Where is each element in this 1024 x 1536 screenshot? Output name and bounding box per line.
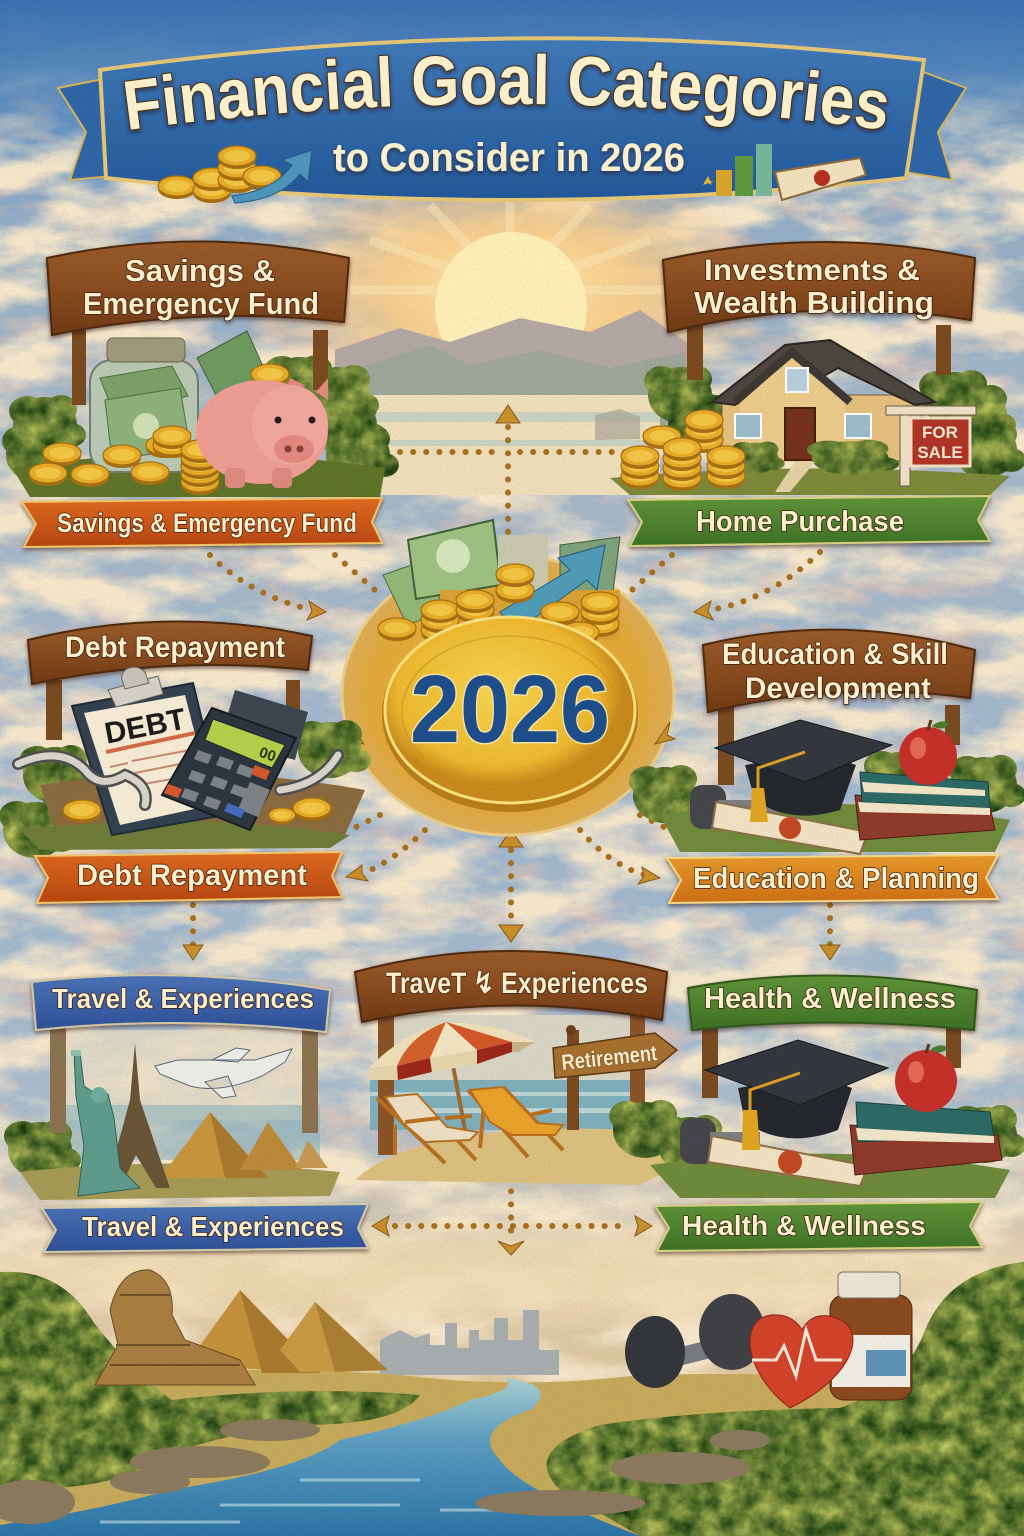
distant mountains and lake	[335, 310, 690, 495]
scene backdrop	[4, 1030, 340, 1200]
panel: beach and retirement	[355, 951, 680, 1185]
bottom landscape	[0, 1262, 1024, 1536]
title banner	[56, 36, 968, 204]
sign: Travel & Experiences	[52, 983, 314, 1014]
icon: medicine bottle	[830, 1272, 912, 1400]
panel: central 2026 coin	[342, 520, 675, 835]
icon: graduation cap	[705, 1040, 888, 1150]
sign	[47, 242, 349, 335]
big coin	[382, 616, 638, 812]
label ribbon	[667, 855, 998, 903]
scene foliage	[629, 750, 1024, 852]
scene foliage	[609, 1100, 1024, 1198]
icon: retirement signpost	[553, 1025, 677, 1130]
title text: Financial Goal Categories	[121, 52, 890, 135]
sign	[688, 975, 977, 1030]
icon: banknote	[197, 331, 267, 397]
icon: pyramids	[186, 1290, 388, 1373]
icon: calculator	[162, 690, 308, 830]
scene ground	[0, 720, 371, 858]
icon: apple	[895, 1044, 957, 1112]
sign: Wealth Building	[694, 285, 934, 320]
icon: apple	[899, 720, 957, 785]
sign: Emergency Fund	[83, 286, 319, 321]
sign: Development	[745, 672, 931, 705]
coins	[63, 798, 331, 824]
icon: for sale sign: FOR	[922, 423, 958, 442]
icon: chains	[18, 755, 338, 805]
rocks	[0, 1419, 770, 1524]
icon: diploma	[712, 802, 868, 854]
icon: money jar	[90, 338, 198, 472]
city skyline	[380, 1310, 559, 1375]
scene foliage	[610, 365, 1024, 495]
panel: savings and emergency fund	[2, 242, 399, 547]
icon: pyramids	[160, 1112, 328, 1178]
foliage right	[547, 1262, 1024, 1536]
icon: house	[712, 340, 935, 492]
label ribbon: Education & Planning	[693, 863, 979, 895]
icon: book stack	[850, 1102, 1002, 1175]
icon: coin stacks	[621, 410, 745, 491]
sign	[703, 630, 975, 712]
ground	[0, 1370, 1024, 1536]
panel: investments and home purchase	[610, 242, 1024, 546]
sign: Savings &	[125, 253, 275, 288]
sign: Investments &	[704, 254, 920, 287]
icon: lounge chairs	[377, 1087, 563, 1163]
label ribbon	[22, 498, 382, 547]
icon: beach umbrella	[369, 1022, 535, 1130]
label ribbon	[35, 852, 342, 903]
icon: debt clipboard: DEBT	[102, 703, 188, 751]
small arrows	[344, 722, 675, 744]
money pile	[378, 520, 620, 645]
sign: Debt Repayment	[65, 631, 285, 664]
panel: debt repayment	[0, 621, 371, 903]
icon: bars, stars and diploma	[703, 144, 866, 200]
icon: coin stacks	[29, 364, 289, 495]
icon: book stack	[855, 772, 995, 840]
sign: Health & Wellness	[704, 983, 956, 1015]
icon: retirement signpost: Retirement	[560, 1040, 659, 1075]
icon: for sale sign: SALE	[917, 443, 963, 462]
halo	[342, 555, 674, 835]
subtitle: to Consider in 2026	[333, 136, 685, 180]
label ribbon	[655, 1202, 982, 1251]
label ribbon: Savings & Emergency Fund	[57, 508, 357, 538]
icon: coins and rising arrow	[158, 146, 312, 203]
panel: health and wellness	[609, 975, 1024, 1251]
river	[0, 1378, 640, 1536]
icon: eiffel tower	[106, 1043, 170, 1188]
sign: TraveT ↯ Experiences	[386, 967, 648, 1000]
sun and sunrise	[240, 155, 780, 425]
scene backdrop	[355, 1015, 680, 1185]
ribbon tails	[58, 70, 966, 180]
label ribbon: Health & Wellness	[682, 1210, 926, 1241]
icon: sphinx	[95, 1270, 255, 1385]
icon: airplane	[155, 1048, 292, 1098]
icon: statue of liberty	[71, 1050, 140, 1196]
year: 2026	[410, 656, 610, 763]
foliage left	[0, 1272, 420, 1488]
label ribbon: Travel & Experiences	[82, 1211, 344, 1242]
sign	[663, 242, 975, 332]
icon: diploma	[708, 1136, 868, 1186]
icon: dumbbell	[680, 1118, 760, 1164]
dotted connector arrows	[183, 405, 840, 1255]
icon: dumbbell	[690, 785, 778, 829]
icon: graduation cap	[715, 720, 892, 822]
panel: education and skill development	[629, 630, 1024, 903]
scene foliage	[2, 355, 399, 497]
icon: dumbbell	[625, 1294, 765, 1388]
label ribbon: Debt Repayment	[77, 859, 307, 892]
sign	[32, 975, 330, 1032]
icon: for sale sign	[886, 406, 976, 486]
label ribbon	[628, 496, 990, 546]
icon: debt clipboard	[72, 667, 225, 835]
label ribbon	[42, 1204, 368, 1252]
label ribbon: Home Purchase	[696, 506, 904, 538]
icon: heart	[750, 1315, 853, 1408]
sign	[355, 951, 667, 1022]
panel: travel and experiences	[4, 975, 368, 1252]
sign	[28, 621, 312, 684]
sign: Education & Skill	[722, 638, 948, 671]
icon: piggy bank	[196, 378, 328, 488]
icon: calculator: 00	[257, 744, 278, 765]
